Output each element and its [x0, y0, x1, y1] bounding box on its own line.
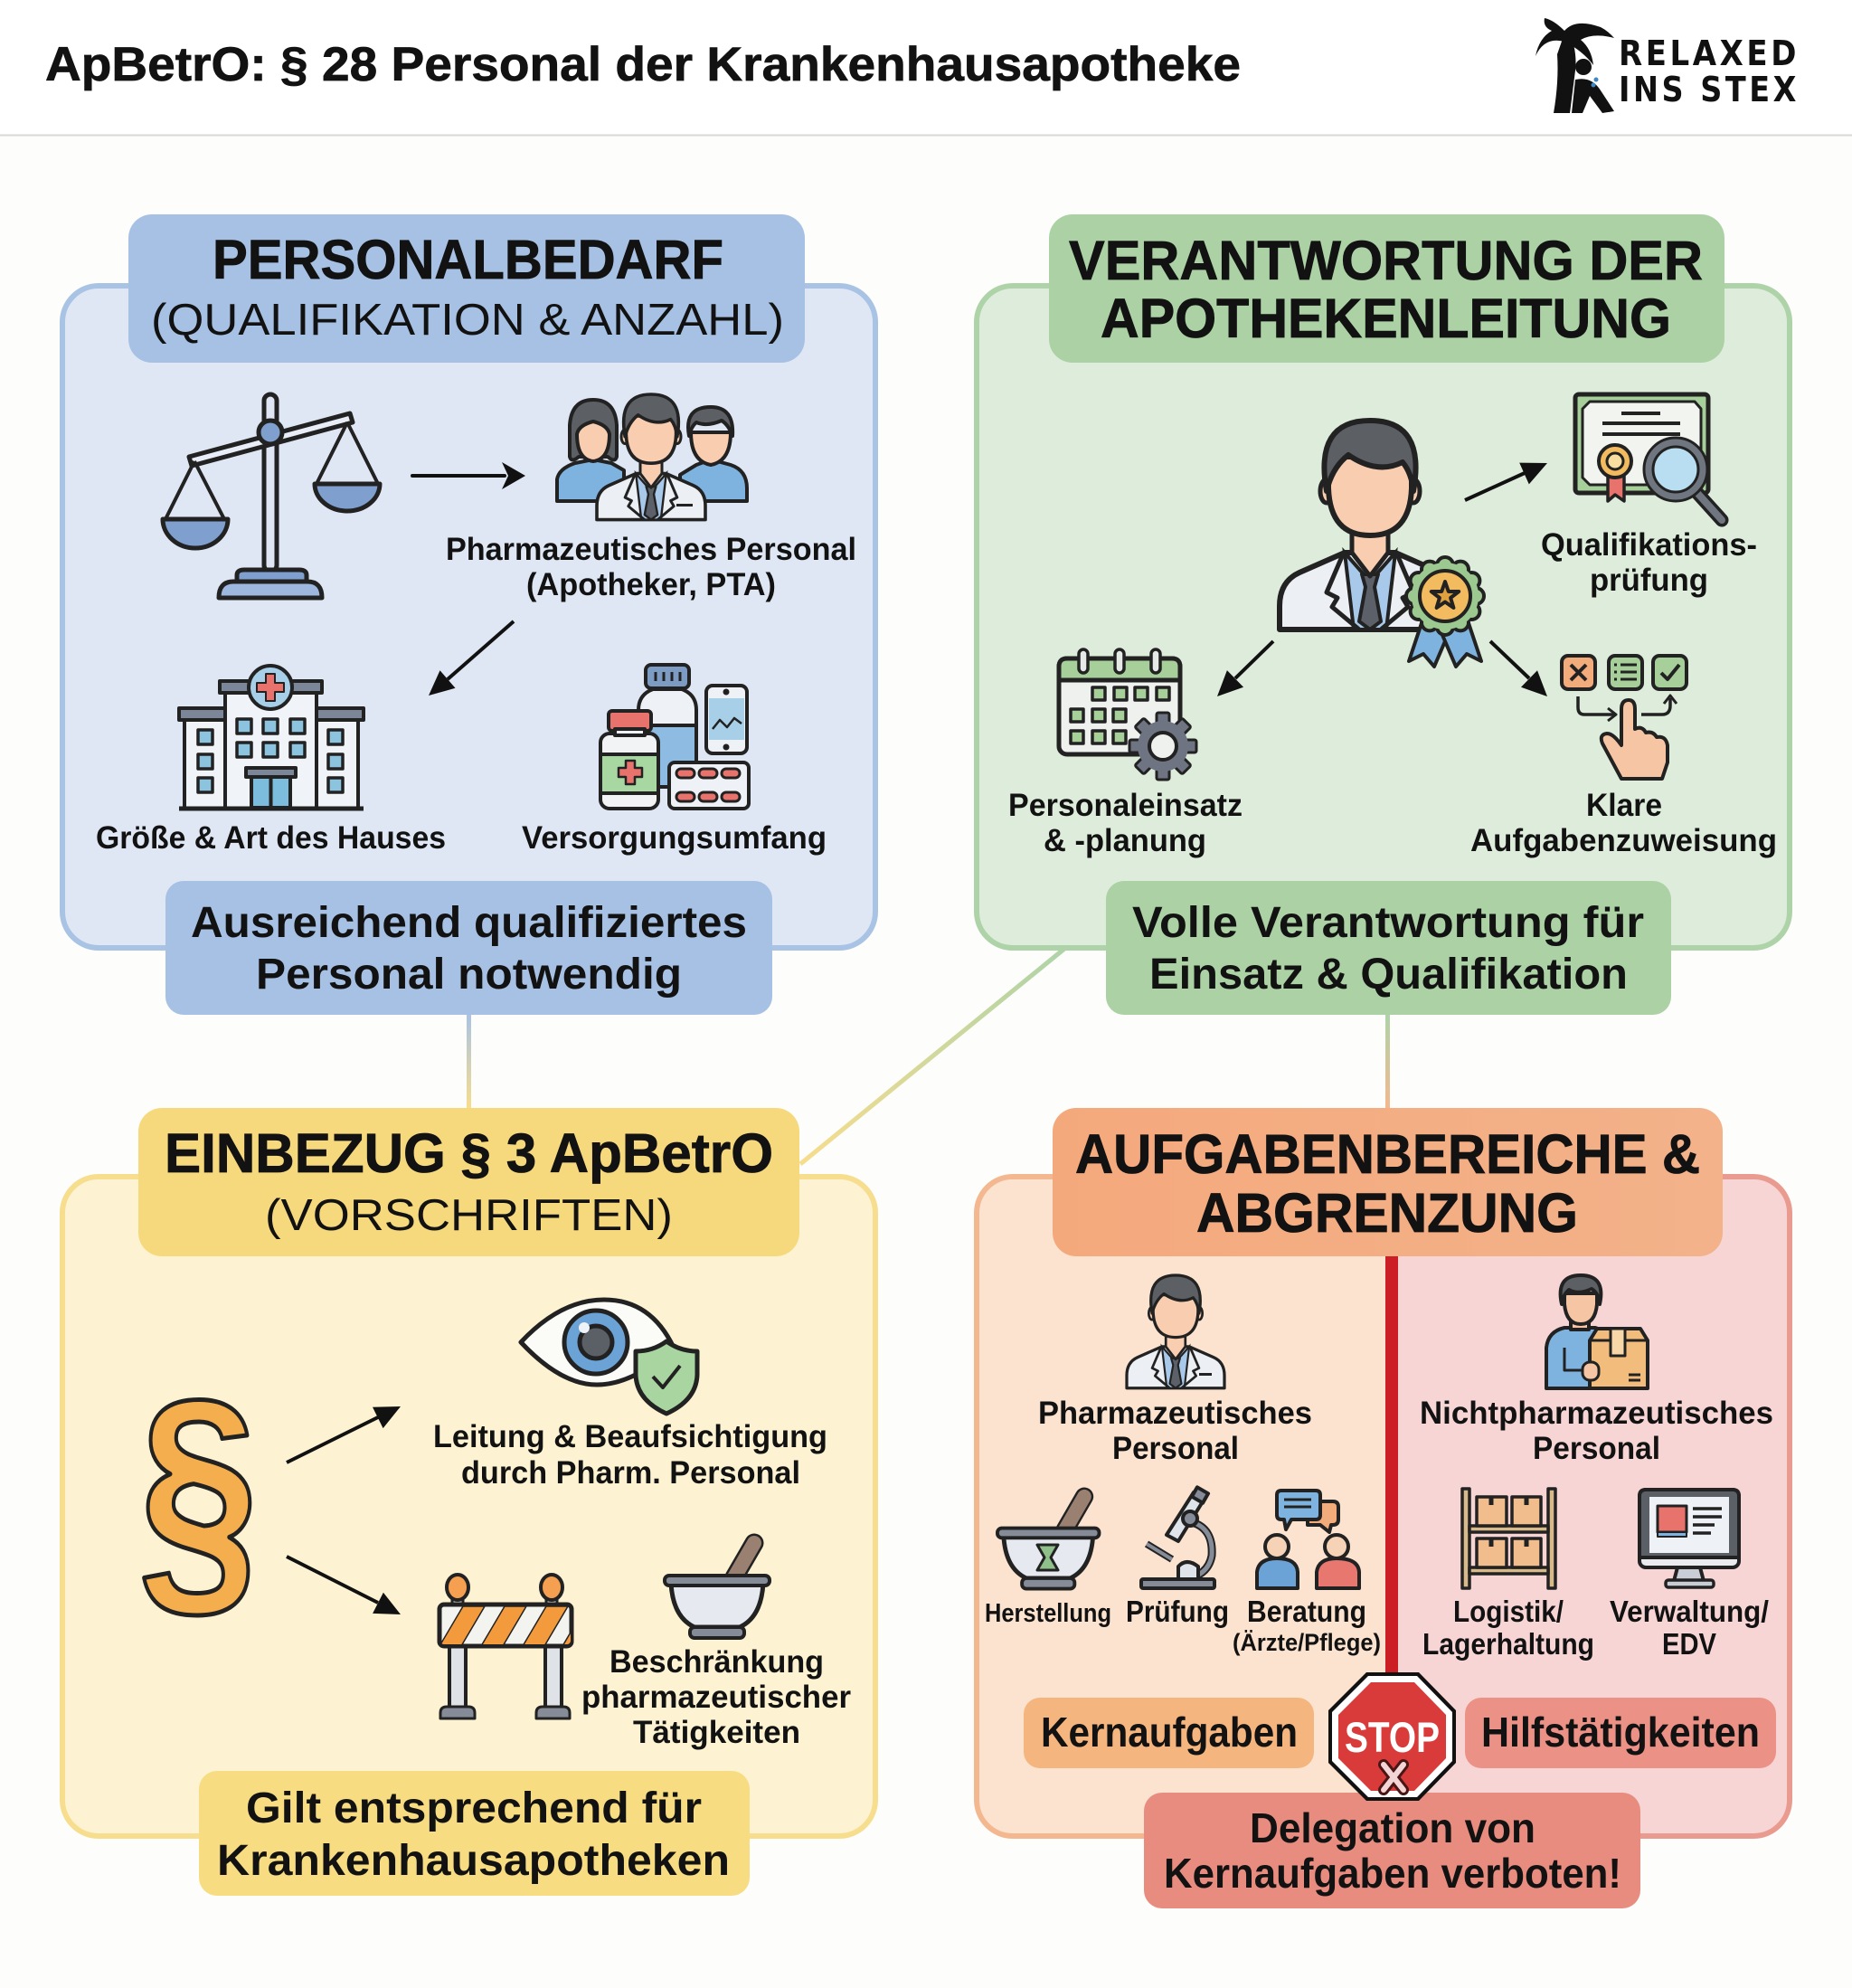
icon: mortar herstellung	[997, 1497, 1099, 1589]
callout: ausreichend qualifiziertes personal	[165, 881, 772, 1015]
callout: gilt entsprechend	[199, 1771, 750, 1896]
heading: personalbedarf: PERSONALBEDARF	[213, 229, 723, 290]
heading: aufgabenbereiche: ABGRENZUNG	[1196, 1182, 1578, 1244]
label: beschraenkung: Beschränkung	[609, 1644, 824, 1680]
icon: mortar and pestle	[665, 1543, 770, 1638]
label: herstellung: Herstellung	[985, 1599, 1111, 1628]
callout: volle verantwortung: Volle Verantwortung für	[1132, 899, 1644, 947]
heading: verantwortung: VERANTWORTUNG DER	[1069, 230, 1703, 291]
label: leitung und beaufsichtigung: Leitung & Beaufsichtigung	[433, 1419, 827, 1454]
connectors between panels	[467, 601, 1390, 1505]
heading: verantwortung	[1049, 214, 1724, 363]
badge: hilfstaetigkeiten: Hilfstätigkeiten	[1481, 1709, 1760, 1756]
callout: gilt entsprechend: Gilt entsprechend für	[246, 1784, 702, 1832]
arrow: staff to hospital	[429, 621, 514, 696]
arrow: to restriction	[287, 1557, 401, 1614]
heading: aufgabenbereiche: AUFGABENBEREICHE &	[1075, 1123, 1700, 1185]
icon: palm tree with person	[1535, 18, 1614, 113]
callout: ausreichend qualifiziertes personal: Ausreichend qualifiziertes	[191, 899, 747, 947]
arrow: to calendar	[1217, 641, 1273, 696]
label: versorgungsumfang: Versorgungsumfang	[522, 820, 827, 856]
callout: delegation verboten: Delegation von	[1250, 1804, 1535, 1851]
label: pharmazeutisches personal: (Apotheker, PTA)	[526, 567, 776, 602]
label: personaleinsatz: & -planung	[1044, 823, 1206, 858]
logo wordmark: RELAXED	[1619, 33, 1800, 73]
label: beratung	[1233, 1595, 1381, 1656]
icon: monitor	[1639, 1490, 1739, 1587]
heading: personalbedarf: (QUALIFIKATION & ANZAHL)	[151, 296, 784, 345]
title: ApBetrO: § 28 Personal der Krankenhausapotheke	[45, 38, 1241, 91]
panel: personalbedarf	[62, 214, 875, 1015]
icon: warehouse shelf	[1462, 1489, 1555, 1588]
icon: pharmacy head with medal	[1280, 421, 1484, 667]
label: beratung: Beratung	[1247, 1595, 1366, 1628]
label: pharmazeutisches personal: Pharmazeutisches Personal	[446, 532, 856, 567]
logo: relaxed ins stex	[1535, 18, 1800, 113]
label: pharmazeutisches personal	[1038, 1396, 1312, 1466]
icon: scales	[163, 394, 380, 598]
label: nichtpharmazeutisches personal: Nichtpharmazeutisches	[1420, 1396, 1773, 1431]
label: beschraenkung: pharmazeutischer	[581, 1680, 851, 1715]
icon: pharmacist	[1127, 1275, 1224, 1388]
label: beschraenkung	[581, 1644, 851, 1750]
label: logistik	[1422, 1595, 1594, 1661]
panel: einbezug paragraph 3	[62, 1108, 875, 1896]
label: logistik: Lagerhaltung	[1422, 1627, 1594, 1661]
label: personaleinsatz	[1008, 788, 1243, 858]
arrow: to supervision	[287, 1406, 401, 1463]
label: beratung: (Ärzte/Pflege)	[1233, 1629, 1381, 1656]
badge: kernaufgaben: Kernaufgaben	[1041, 1709, 1298, 1756]
icon: stop sign	[1328, 1672, 1456, 1801]
divider: red line	[1385, 1256, 1398, 1681]
callout: volle verantwortung: Einsatz & Qualifikation	[1149, 951, 1628, 999]
icon: certificate with magnifier	[1575, 394, 1722, 520]
label: leitung und beaufsichtigung	[433, 1419, 827, 1491]
callout: ausreichend qualifiziertes personal: Personal notwendig	[256, 951, 682, 999]
arrow: to qualification check	[1465, 463, 1547, 500]
icon: pharmaceutical team	[557, 394, 747, 520]
label: groesse und art: Größe & Art des Hauses	[96, 820, 446, 856]
label: klare aufgabenzuweisung: Aufgabenzuweisung	[1470, 823, 1777, 858]
label: beschraenkung: Tätigkeiten	[633, 1715, 800, 1750]
icon: microscope	[1141, 1487, 1214, 1588]
label: klare aufgabenzuweisung: Klare	[1586, 788, 1662, 823]
icon: stop sign: STOP	[1345, 1713, 1440, 1761]
panel: verantwortung der apothekenleitung	[977, 214, 1790, 1015]
icon: medication	[600, 665, 749, 809]
label: leitung und beaufsichtigung: durch Pharm. Personal	[461, 1455, 800, 1491]
icon: barrier	[438, 1573, 573, 1720]
arrow: scales to staff	[411, 462, 525, 489]
header bar	[0, 0, 1852, 136]
label: nichtpharmazeutisches personal: Personal	[1533, 1431, 1660, 1466]
label: qualifikationspruefung	[1541, 527, 1757, 598]
heading: verantwortung: APOTHEKENLEITUNG	[1101, 288, 1671, 349]
label: qualifikationspruefung: Qualifikations-	[1541, 527, 1757, 563]
label: personaleinsatz: Personaleinsatz	[1008, 788, 1243, 823]
badge: kernaufgaben	[1024, 1698, 1314, 1768]
badge: hilfstaetigkeiten	[1465, 1698, 1776, 1768]
logo wordmark: INS STEX	[1619, 70, 1800, 109]
icon: calendar with gear	[1059, 649, 1196, 780]
panel: aufgabenbereiche und abgrenzung	[977, 1108, 1790, 1908]
icon: counselling	[1257, 1491, 1359, 1588]
heading: einbezug: (VORSCHRIFTEN)	[265, 1191, 673, 1240]
label: verwaltung: Verwaltung/	[1610, 1595, 1769, 1628]
label: pharmazeutisches personal: Pharmazeutisches	[1038, 1396, 1312, 1431]
logo wordmark	[1619, 33, 1800, 109]
label: logistik: Logistik/	[1453, 1595, 1564, 1628]
label: klare aufgabenzuweisung	[1470, 788, 1777, 858]
arrow: to task assignment	[1490, 641, 1547, 696]
callout: gilt entsprechend: Krankenhausapotheken	[217, 1837, 730, 1885]
icon: eye with shield	[521, 1300, 697, 1414]
heading: aufgabenbereiche	[1053, 1108, 1723, 1256]
heading: personalbedarf	[128, 214, 805, 363]
icon: task assignment hand	[1562, 656, 1687, 779]
callout: delegation verboten: Kernaufgaben verboten!	[1164, 1850, 1621, 1897]
icon: hospital	[179, 666, 364, 809]
icon: warehouse worker	[1546, 1275, 1648, 1388]
icon: paragraph sign: §	[138, 1344, 259, 1642]
callout: delegation verboten	[1144, 1793, 1640, 1908]
label: nichtpharmazeutisches personal	[1420, 1396, 1773, 1466]
label: verwaltung	[1610, 1595, 1769, 1661]
label: pharmazeutisches personal: Personal	[1112, 1431, 1239, 1466]
heading: einbezug: EINBEZUG § 3 ApBetrO	[165, 1122, 773, 1184]
label: verwaltung: EDV	[1662, 1627, 1716, 1661]
label: pharmazeutisches personal	[446, 532, 856, 602]
heading: einbezug	[138, 1108, 799, 1256]
label: qualifikationspruefung: prüfung	[1590, 563, 1708, 598]
callout: volle verantwortung	[1106, 881, 1671, 1015]
label: pruefung: Prüfung	[1126, 1595, 1229, 1628]
